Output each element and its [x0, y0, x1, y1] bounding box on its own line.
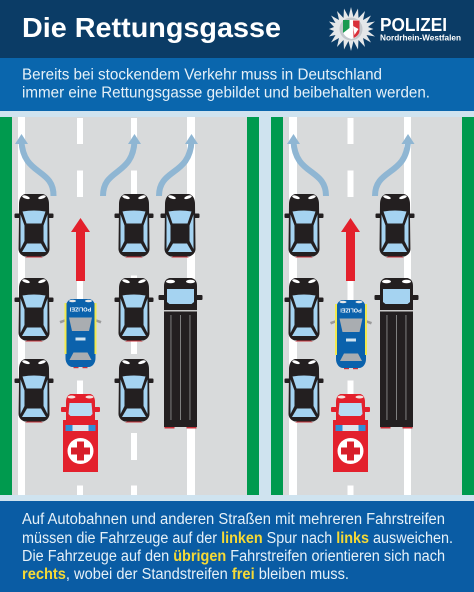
explanation text: Die Fahrzeuge auf den übrigen Fahrstreifen orientieren sich nach [22, 548, 461, 565]
panel: right road, two lanes [271, 117, 474, 495]
cars: left lane [14, 194, 54, 422]
logo wordmark: POLIZEI [380, 15, 447, 35]
police logo [329, 7, 461, 51]
ambulance [331, 394, 370, 472]
explanation text: müssen die Fahrzeuge auf der linken Spur nach links ausweichen. [22, 530, 460, 547]
icon: police star [329, 7, 375, 51]
cars: left lane [284, 194, 324, 422]
panel: left road, three lanes [0, 117, 259, 495]
arrow: red emergency direction [71, 218, 90, 281]
header bar [0, 0, 474, 58]
title: Die Rettungsgasse [22, 12, 281, 43]
intro text: immer eine Rettungsgasse gebildet und beibehalten werden. [22, 84, 430, 102]
arrows: evasive directions [15, 134, 198, 196]
intro text: Bereits bei stockendem Verkehr muss in Deutschland [22, 66, 382, 84]
car: right lane [376, 194, 414, 258]
truck [374, 278, 418, 428]
cars: middle lane [114, 194, 154, 422]
police car [330, 300, 372, 369]
explanation panel [0, 501, 474, 592]
car: right lane [160, 194, 200, 258]
logo subtitle: Nordrhein-Westfalen [380, 32, 461, 42]
truck [158, 278, 202, 428]
arrows: evasive directions [287, 134, 414, 196]
police car [60, 299, 102, 368]
arrow: red emergency direction [341, 218, 360, 281]
intro panel [0, 58, 474, 111]
explanation text: Auf Autobahnen und anderen Straßen mit mehreren Fahrstreifen [22, 511, 445, 528]
explanation text: rechts, wobei der Standstreifen frei bleiben muss. [22, 566, 355, 583]
ambulance [61, 394, 100, 472]
